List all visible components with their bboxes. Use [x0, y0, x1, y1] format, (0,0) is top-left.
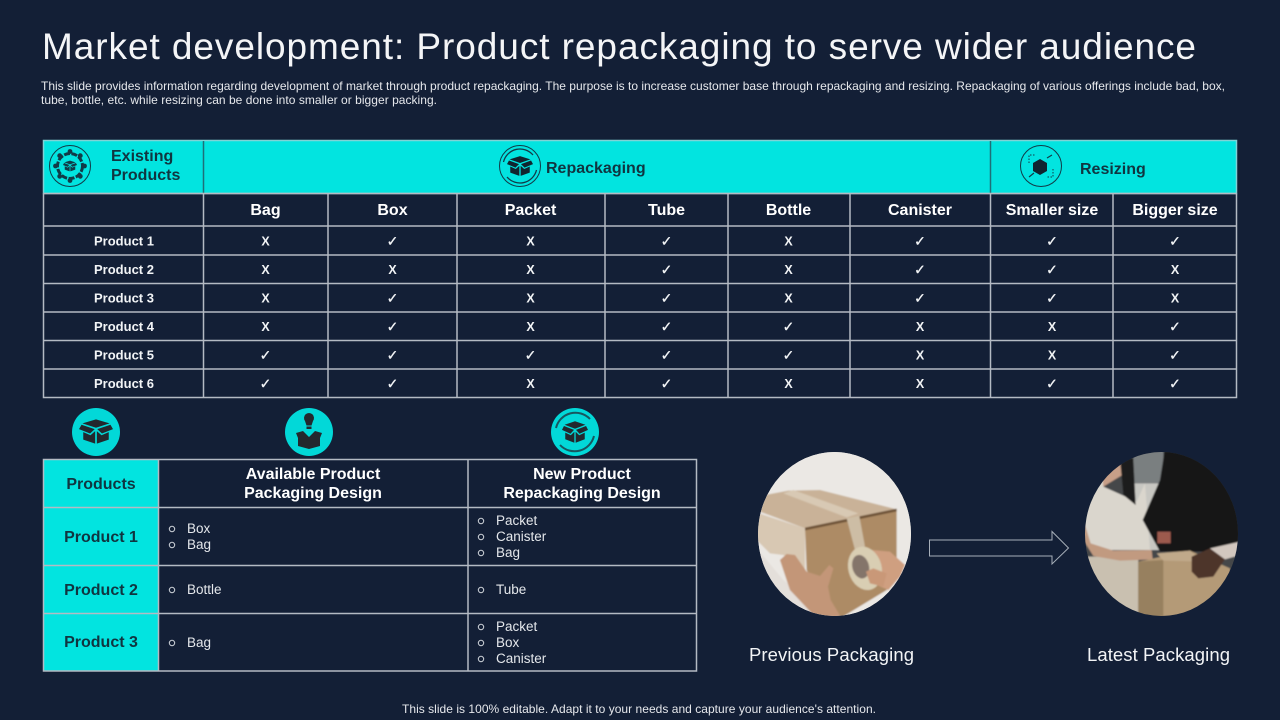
row: product 5: Product 5 [94, 348, 154, 362]
row: product 1 design: Packet [496, 513, 538, 528]
icon: resizing [1020, 146, 1062, 186]
footer note: This slide is 100% editable. Adapt it to your needs and capture your audience's attention. [402, 702, 876, 716]
row: product 2: Product 2 [94, 262, 154, 277]
matrix column headings: Tube [648, 202, 685, 219]
heading: existing products: Existing [111, 148, 173, 165]
row: product 3 design: Box [496, 635, 520, 650]
row: product 4: ✓ [387, 320, 398, 336]
panel: product matrix table [44, 140, 1236, 398]
product column fill [44, 460, 158, 671]
packaging table headings: New Product [533, 466, 632, 483]
panel: packaging design table [44, 460, 696, 671]
row: product 2: ✓ [914, 262, 926, 278]
row: product 5: ✓ [387, 348, 398, 364]
icon: box with light bulb badge [285, 408, 333, 456]
packaging table headings: Available Product [246, 466, 381, 483]
row: product 1 design: Bag [187, 537, 211, 552]
row: product 5: ✓ [1169, 348, 1181, 364]
row: product 5: ✓ [783, 348, 794, 364]
row: product 2: X [784, 263, 793, 277]
row: product 1 [94, 234, 1181, 250]
row: product 2: X [1171, 263, 1180, 277]
row: product 5: X [916, 348, 925, 362]
row: product 1: ✓ [387, 234, 398, 250]
description text: This slide provides information regarding development of market through product repackaging. The purpose is to increase customer base through repackaging and resizing. Repackaging of various offerings include bad, box, [41, 79, 1225, 93]
row: product 3: X [261, 292, 270, 306]
row: product 6: X [916, 377, 925, 391]
row: product 6: X [526, 377, 535, 391]
description text: tube, bottle, etc. while resizing can be done into smaller or bigger packing. [41, 93, 437, 107]
heading: resizing: Resizing [1080, 161, 1146, 178]
row: product 6: Product 6 [94, 376, 154, 391]
row: product 2: X [261, 263, 270, 277]
row: product 3: ✓ [1046, 291, 1058, 307]
row: product 3 design: Canister [496, 651, 547, 666]
photo: previous packaging [758, 452, 911, 616]
row: product 3: Product 3 [94, 290, 154, 306]
row: product 3: X [526, 292, 535, 306]
packaging table grid [44, 460, 696, 671]
row: product 3: ✓ [387, 291, 398, 307]
row: product 5: ✓ [260, 348, 271, 364]
matrix column headings: Box [377, 202, 408, 219]
row: product 5: ✓ [525, 348, 536, 364]
row: product 1 design: Bag [496, 545, 520, 560]
row: product 1: X [261, 234, 270, 248]
row: product 1: ✓ [914, 234, 926, 250]
matrix header band [44, 140, 1236, 194]
heading: existing products [111, 148, 180, 184]
row: product 3 design: Bag [187, 635, 211, 650]
row: product 4: X [916, 320, 925, 334]
row: product 2 design: Bottle [187, 582, 222, 597]
title: Market development: Product repackaging to serve wider audience [42, 26, 1196, 67]
row: product 4 [94, 319, 1181, 336]
caption: previous packaging: Previous Packaging [749, 644, 914, 665]
row: product 1: ✓ [661, 234, 672, 250]
matrix column headings: Bag [250, 202, 281, 219]
row: product 3: X [784, 292, 793, 306]
icon: arrow [930, 532, 1068, 564]
row: product 1: X [784, 234, 793, 248]
row: product 3 design: Product 3 [64, 634, 138, 651]
icon: repackaging badge [551, 408, 599, 456]
caption: latest packaging: Latest Packaging [1087, 644, 1230, 665]
matrix column headings: Canister [888, 202, 952, 219]
row: product 3 [94, 290, 1180, 307]
row: product 3: ✓ [661, 291, 672, 307]
matrix grid [44, 194, 1236, 398]
photo: latest packaging [1085, 452, 1238, 616]
icon: existing products gear [50, 146, 90, 186]
row: product 6: ✓ [1169, 376, 1181, 392]
row: product 4: ✓ [1169, 320, 1181, 336]
row: product 2: X [388, 263, 397, 277]
heading: existing products: Products [111, 167, 180, 184]
row: product 5: X [1048, 348, 1057, 362]
row: product 4: X [261, 320, 270, 334]
row: product 3 design [64, 619, 547, 666]
row: product 1: ✓ [1046, 234, 1058, 250]
matrix column headings: Smaller size [1006, 202, 1098, 219]
row: product 4: Product 4 [94, 319, 155, 334]
row: product 2: ✓ [1046, 262, 1058, 278]
row: product 4: X [526, 320, 535, 334]
row: product 6: ✓ [1046, 376, 1058, 392]
row: product 5: ✓ [661, 348, 672, 364]
row: product 3: ✓ [914, 291, 926, 307]
row: product 1 design [64, 513, 547, 560]
row: product 2: X [526, 263, 535, 277]
description text [41, 79, 1225, 107]
matrix column headings: Bigger size [1132, 202, 1218, 219]
row: product 4: ✓ [783, 320, 794, 336]
row: product 2 design [64, 582, 526, 599]
heading: repackaging: Repackaging [546, 160, 646, 177]
row: product 4: X [1048, 320, 1057, 334]
packaging table headings [66, 466, 661, 502]
packaging table headings: Products [66, 476, 136, 493]
row: product 3: X [1171, 292, 1180, 306]
row: product 1: Product 1 [94, 234, 154, 248]
row: product 6 [94, 376, 1181, 392]
row: product 1: X [526, 234, 535, 248]
matrix column headings: Bottle [766, 202, 811, 219]
row: product 1 design: Product 1 [64, 529, 138, 546]
row: product 1 design: Canister [496, 529, 547, 544]
row: product 4: ✓ [661, 320, 672, 336]
row: product 1: ✓ [1169, 234, 1181, 250]
row: product 6: ✓ [260, 376, 271, 392]
packaging table headings: Packaging Design [244, 485, 382, 502]
row: product 5 [94, 348, 1181, 364]
row: product 2: ✓ [661, 262, 672, 278]
row: product 3 design: Packet [496, 619, 538, 634]
row: product 6: X [784, 377, 793, 391]
row: product 2 [94, 262, 1180, 278]
icon: open box badge [72, 408, 120, 456]
matrix column headings: Packet [505, 202, 557, 219]
row: product 2 design: Tube [496, 582, 526, 597]
packaging table headings: Repackaging Design [503, 485, 661, 502]
row: product 2 design: Product 2 [64, 582, 138, 599]
row: product 6: ✓ [661, 376, 672, 392]
row: product 6: ✓ [387, 376, 398, 392]
matrix column headings [250, 202, 1218, 219]
icon: repackaging [500, 146, 540, 186]
row: product 1 design: Box [187, 521, 211, 536]
